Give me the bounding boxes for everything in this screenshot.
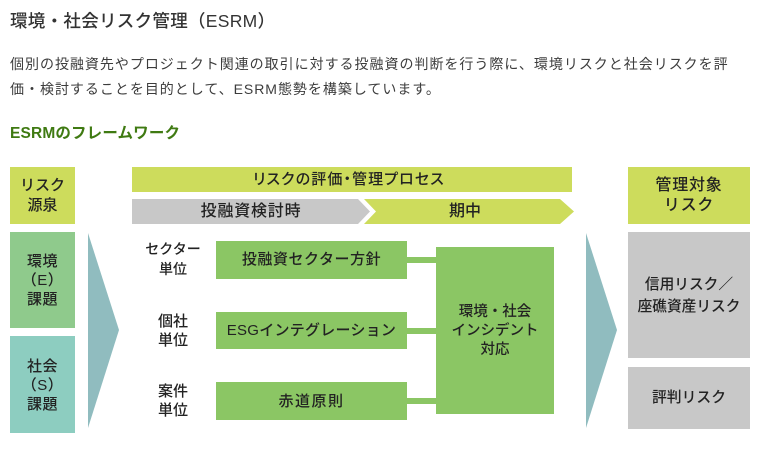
row label: sector: セクター — [145, 241, 201, 257]
panel: reputation risk — [628, 367, 750, 429]
box: equator principles — [216, 382, 407, 420]
panel: environmental issues — [10, 232, 75, 328]
panel: environmental issues: 課題 — [27, 290, 58, 308]
intro text: 個別の投融資先やプロジェクト関連の取引に対する投融資の判断を行う際に、環境リスクと社会リスクを評 — [10, 56, 729, 72]
process header bar: リスクの評価・管理プロセス — [253, 171, 445, 188]
row label: company: 個社 — [158, 313, 188, 330]
arrow: at investment review — [132, 199, 370, 224]
box: ESG integration — [216, 312, 407, 349]
panel: risk sources header: リスク — [20, 176, 65, 194]
panel: managed risks header: 管理対象 — [655, 176, 723, 194]
row label: transaction — [158, 383, 188, 419]
row label: company — [158, 313, 188, 349]
title: 環境・社会リスク管理（ESRM） — [10, 11, 275, 31]
box: sector policy: 投融資セクター方針 — [242, 250, 381, 268]
panel: social issues: （S） — [22, 376, 63, 394]
intro text: 価・検討することを目的として、ESRM態勢を構築しています。 — [10, 81, 441, 97]
framework heading: ESRMのフレームワーク — [10, 125, 180, 142]
intro text — [10, 56, 729, 97]
box: incident response: 対応 — [480, 342, 510, 358]
row label: sector: 単位 — [159, 261, 187, 277]
connector: company — [407, 328, 437, 334]
box: incident response — [436, 247, 554, 414]
arrow: at investment review: 投融資検討時 — [201, 203, 301, 220]
panel: social issues — [10, 336, 75, 433]
row label: transaction: 案件 — [158, 383, 188, 400]
arrow: during term — [364, 199, 574, 224]
panel: social issues: 課題 — [27, 396, 58, 412]
box: sector policy — [216, 241, 407, 279]
panel: risk sources header — [10, 167, 75, 224]
row label: company: 単位 — [158, 332, 188, 349]
panel: credit risk — [628, 232, 750, 358]
panel: environmental issues: （E） — [22, 272, 63, 288]
panel: managed risks header: リスク — [664, 196, 714, 214]
box: ESG integration: ESGインテグレーション — [227, 322, 396, 339]
panel: social issues: 社会 — [27, 358, 58, 374]
row label: sector — [145, 241, 201, 277]
panel: credit risk: 座礁資産リスク — [638, 298, 740, 314]
box: incident response: インシデント — [452, 323, 538, 339]
panel: environmental issues: 環境 — [27, 252, 58, 270]
panel: reputation risk: 評判リスク — [652, 390, 726, 406]
panel: risk sources header: 源泉 — [27, 196, 58, 214]
row label: transaction: 単位 — [158, 402, 188, 419]
box: equator principles: 赤道原則 — [278, 393, 344, 410]
panel: managed risks header — [628, 167, 750, 224]
connector: transaction — [407, 398, 437, 404]
panel: credit risk: 信用リスク／ — [645, 276, 733, 292]
arrow: during term: 期中 — [449, 203, 481, 220]
connector: sector — [407, 257, 437, 263]
process header bar — [132, 167, 572, 192]
box: incident response: 環境・社会 — [459, 304, 531, 320]
